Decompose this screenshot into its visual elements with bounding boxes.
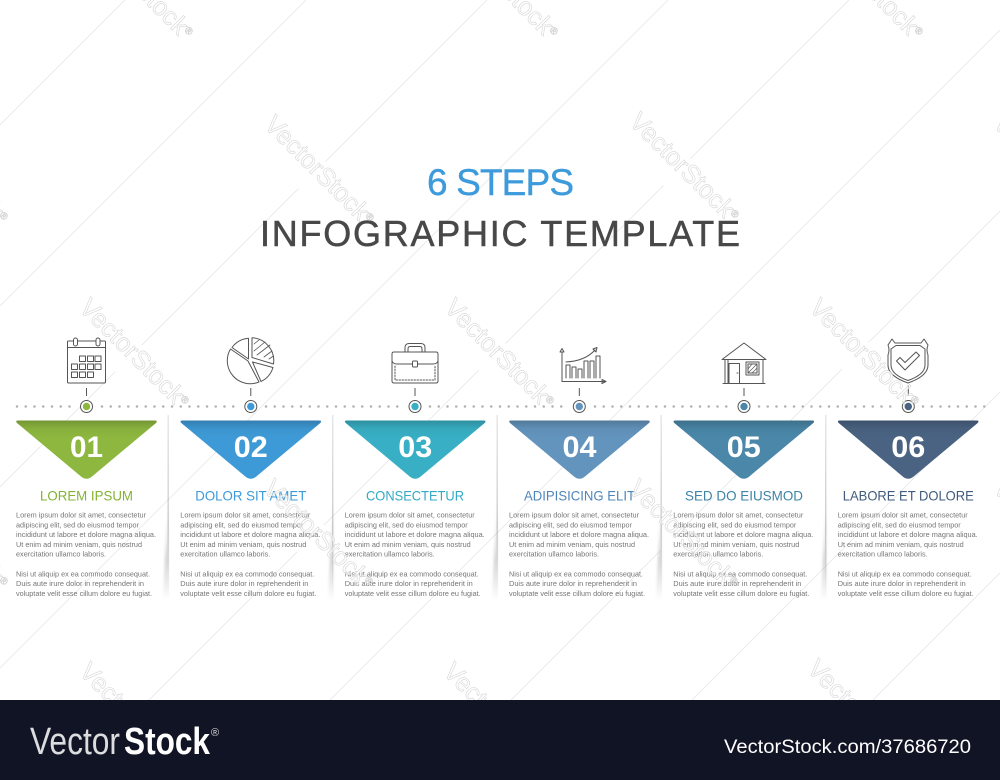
body text: Ut enim ad minim veniam, quis nostrud: [180, 540, 306, 549]
number badge: 02: [234, 431, 268, 464]
heading: DOLOR SIT AMET: [195, 488, 307, 504]
watermarks: ®: [728, 208, 741, 221]
watermarks: VectorStock: [259, 110, 375, 226]
title: [260, 162, 740, 254]
connector and node: [80, 388, 92, 412]
logo: [30, 721, 219, 763]
body text: [509, 510, 649, 598]
number badge: [345, 420, 486, 479]
body text: Lorem ipsum dolor sit amet, consectetur: [673, 510, 804, 520]
panel: step 05: [673, 343, 814, 598]
body text: exercitation ullamco laboris.: [16, 550, 106, 559]
watermarks: Vector: [438, 657, 509, 729]
image id: VectorStock.com/37686720: [724, 737, 971, 758]
connector and node: [573, 388, 585, 412]
icon: briefcase: [392, 344, 438, 383]
body text: Lorem ipsum dolor sit amet, consectetur: [509, 510, 639, 520]
watermarks: ®: [178, 394, 191, 407]
watermarks: ®: [182, 25, 195, 38]
body text: Nisi ut aliquip ex ea commodo consequat.: [345, 569, 479, 578]
number badge: [838, 420, 978, 479]
icon: calendar: [68, 338, 106, 383]
body text: Duis aute irure dolor in reprehenderit in: [673, 579, 801, 588]
icon: growth chart: [560, 348, 606, 384]
watermarks: Vector: [74, 657, 145, 729]
number badge: [509, 420, 650, 479]
body text: voluptate velit esse cillum dolore eu fugiat.: [838, 589, 974, 598]
body text: Lorem ipsum dolor sit amet, consectetur: [16, 510, 146, 520]
heading: CONSECTETUR: [366, 488, 464, 504]
heading: SED DO EIUSMOD: [685, 488, 803, 504]
body text: incididunt ut labore et dolore magna aliqua.: [509, 530, 649, 539]
body text: adipiscing elit, sed do eiusmod tempor: [16, 520, 139, 529]
watermarks: VectorStock: [623, 474, 739, 590]
body text: voluptate velit esse cillum dolore eu fugiat.: [673, 589, 809, 598]
watermarks: VectorStock: [74, 293, 190, 409]
body text: Nisi ut aliquip ex ea commodo consequat.: [673, 569, 807, 578]
connector and node: [902, 385, 914, 412]
connector and node: [738, 388, 750, 412]
number badge: 04: [562, 431, 597, 464]
logo: Stock: [124, 721, 211, 763]
body text: adipiscing elit, sed do eiusmod tempor: [673, 520, 797, 529]
body text: exercitation ullamco laboris.: [345, 550, 435, 559]
body text: [838, 510, 978, 598]
watermarks: VectorStock: [439, 293, 555, 409]
body text: voluptate velit esse cillum dolore eu fugiat.: [180, 589, 316, 598]
number badge: 06: [891, 431, 925, 464]
body text: adipiscing elit, sed do eiusmod tempor: [838, 520, 961, 529]
number badge: 01: [70, 431, 103, 464]
body text: exercitation ullamco laboris.: [673, 550, 763, 559]
watermarks: ®: [912, 25, 925, 38]
number badge: 05: [727, 431, 761, 464]
panel: step 03: [345, 344, 486, 598]
heading: infographic template: INFOGRAPHIC TEMPLATE: [260, 213, 740, 254]
body text: Duis aute irure dolor in reprehenderit in: [180, 579, 308, 588]
dotted timeline: [17, 405, 986, 408]
body text: Nisi ut aliquip ex ea commodo consequat.: [16, 569, 150, 578]
body text: Duis aute irure dolor in reprehenderit in: [345, 579, 473, 588]
body text: incididunt ut labore et dolore magna aliqua.: [838, 530, 978, 539]
body text: Lorem ipsum dolor sit amet, consectetur: [838, 510, 968, 520]
body text: [180, 510, 320, 598]
icon: house: [722, 343, 766, 384]
body text: incididunt ut labore et dolore magna aliqua.: [673, 530, 813, 539]
heading: LOREM IPSUM: [40, 488, 133, 504]
watermarks: ®: [727, 575, 740, 588]
watermarks: ®: [543, 394, 556, 407]
logo: ®: [211, 727, 219, 739]
logo: Vector: [30, 721, 120, 763]
body text: Duis aute irure dolor in reprehenderit in: [16, 579, 144, 588]
body text: Lorem ipsum dolor sit amet, consectetur: [180, 510, 311, 520]
panel: step 01: [16, 338, 157, 598]
heading: ADIPISICING ELIT: [524, 488, 635, 504]
body text: [673, 510, 813, 598]
body text: Nisi ut aliquip ex ea commodo consequat.: [180, 569, 314, 578]
watermarks: VectorStock: [804, 293, 920, 409]
body text: Ut enim ad minim veniam, quis nostrud: [345, 540, 471, 549]
number badge: [16, 420, 157, 479]
number badge: 03: [398, 431, 432, 464]
connector and node: [409, 388, 421, 412]
panel: step 04: [509, 348, 650, 598]
body text: Lorem ipsum dolor sit amet, consectetur: [345, 510, 475, 520]
watermarks: ®: [363, 211, 376, 224]
icon: shield with check: [888, 339, 928, 383]
number badge: [180, 420, 321, 479]
body text: incididunt ut labore et dolore magna aliqua.: [345, 530, 485, 539]
body text: voluptate velit esse cillum dolore eu fugiat.: [509, 589, 645, 598]
watermarks: VectorStock: [624, 107, 740, 223]
heading: LABORE ET DOLORE: [843, 488, 974, 504]
body text: exercitation ullamco laboris.: [838, 550, 928, 559]
heading: 6 steps: 6 STEPS: [427, 162, 574, 203]
body text: voluptate velit esse cillum dolore eu fugiat.: [16, 589, 152, 598]
watermarks: ®: [362, 575, 375, 588]
body text: Ut enim ad minim veniam, quis nostrud: [16, 540, 142, 549]
body text: adipiscing elit, sed do eiusmod tempor: [180, 520, 304, 529]
connector and node: [245, 388, 257, 412]
body text: Nisi ut aliquip ex ea commodo consequat.: [509, 569, 643, 578]
body text: incididunt ut labore et dolore magna aliqua.: [180, 530, 320, 539]
body text: exercitation ullamco laboris.: [509, 550, 599, 559]
column shadows: [163, 415, 826, 600]
body text: adipiscing elit, sed do eiusmod tempor: [345, 520, 468, 529]
body text: [345, 510, 485, 598]
watermarks: VectorStock: [258, 474, 374, 590]
icon: pie chart: [227, 338, 274, 384]
panel: step 06: [838, 339, 978, 598]
body text: Ut enim ad minim veniam, quis nostrud: [838, 540, 964, 549]
body text: Ut enim ad minim veniam, quis nostrud: [509, 540, 635, 549]
body text: adipiscing elit, sed do eiusmod tempor: [509, 520, 632, 529]
number badge: [674, 420, 814, 479]
body text: voluptate velit esse cillum dolore eu fugiat.: [345, 589, 481, 598]
body text: exercitation ullamco laboris.: [180, 550, 270, 559]
watermarks: Vector: [802, 654, 873, 726]
body text: [16, 510, 156, 598]
footer bar: [0, 700, 1000, 780]
watermarks: ®: [547, 25, 560, 38]
body text: Duis aute irure dolor in reprehenderit in: [509, 579, 637, 588]
body text: Nisi ut aliquip ex ea commodo consequat.: [838, 569, 972, 578]
body text: incididunt ut labore et dolore magna aliqua.: [16, 530, 156, 539]
watermarks: ®: [908, 394, 921, 407]
body text: Duis aute irure dolor in reprehenderit in: [838, 579, 966, 588]
body text: Ut enim ad minim veniam, quis nostrud: [673, 540, 799, 549]
panel: step 02: [180, 338, 321, 598]
